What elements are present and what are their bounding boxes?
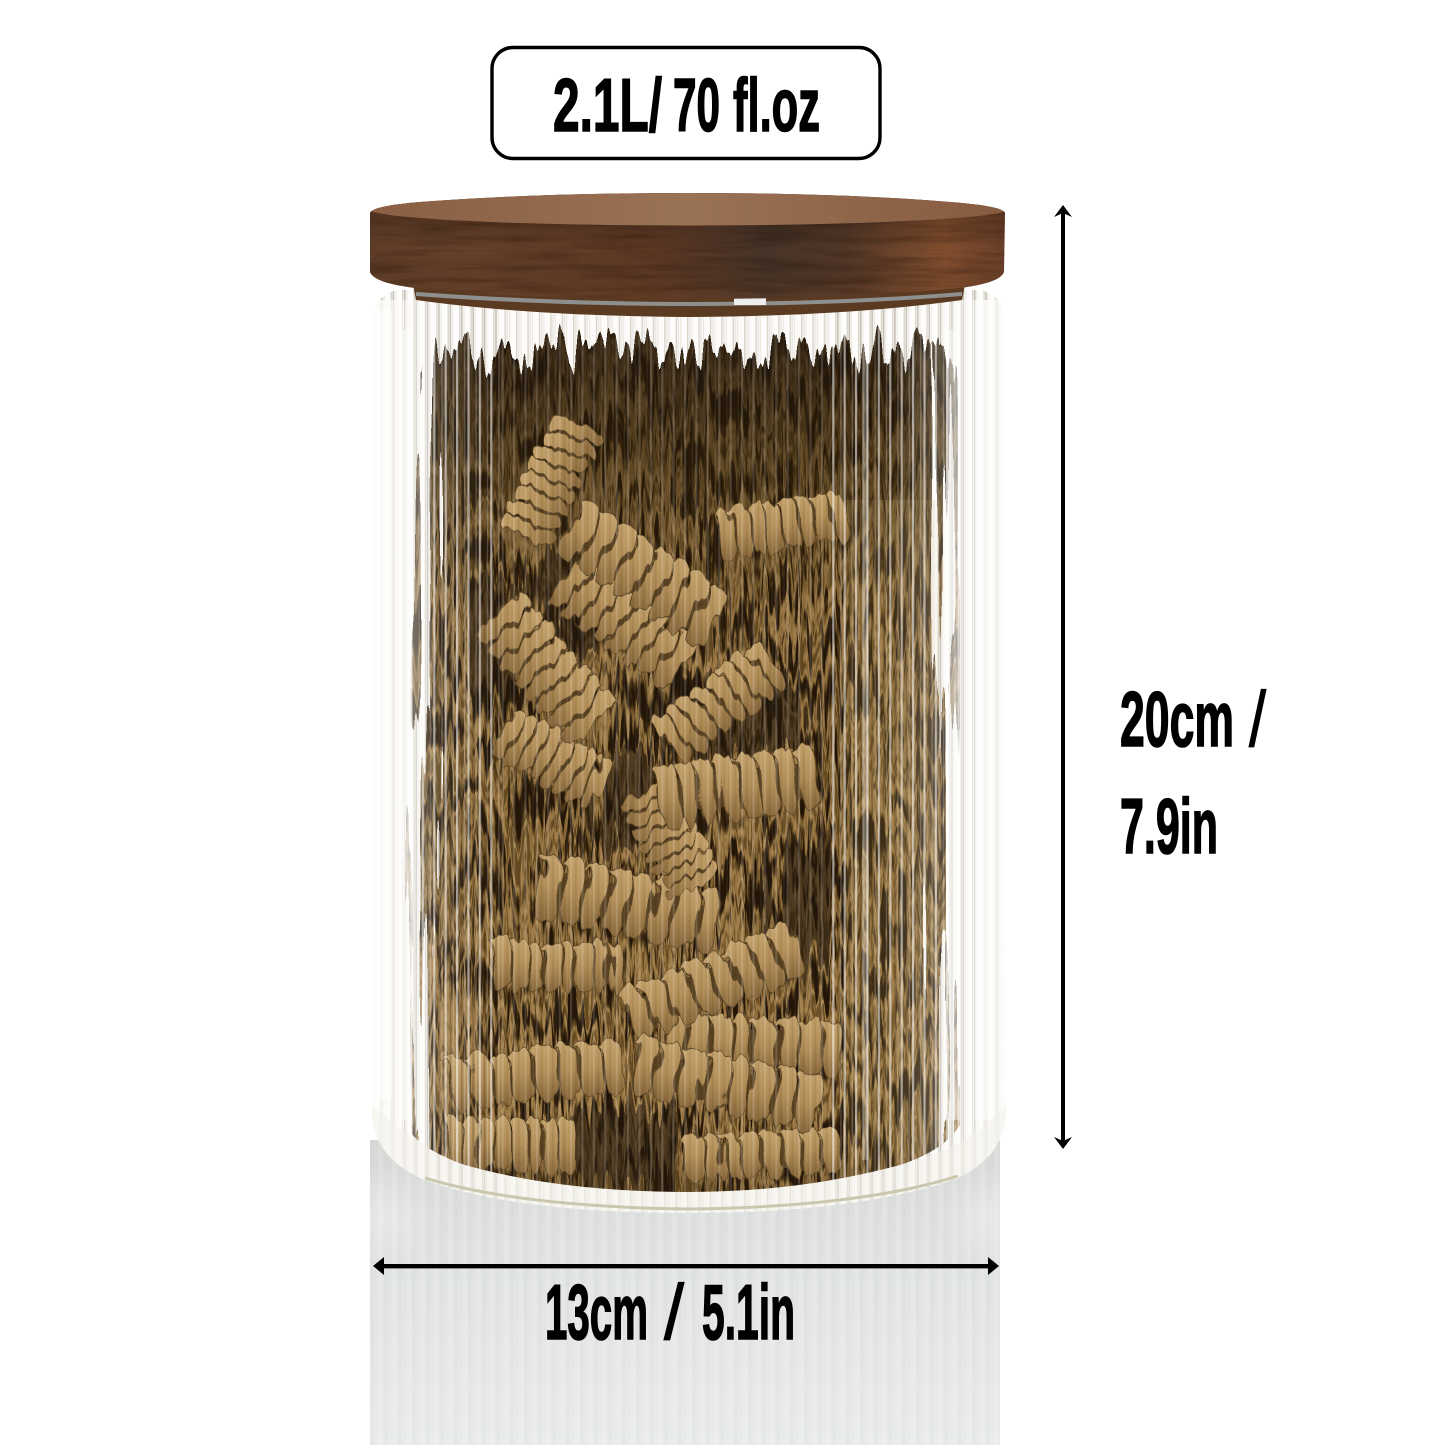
width label: 13cm bbox=[545, 1268, 648, 1356]
glass rib highlights at the sides bbox=[381, 290, 500, 1199]
height arrow bbox=[1054, 205, 1072, 1149]
height label: / bbox=[1249, 675, 1266, 763]
lid side bbox=[368, 190, 1008, 302]
height label: 20cm bbox=[1120, 675, 1234, 763]
base rim bbox=[425, 1176, 958, 1209]
height label: 7.9in bbox=[1120, 782, 1218, 870]
width label: 5.1in bbox=[702, 1268, 795, 1356]
dark hollows between pasta bbox=[460, 530, 830, 1195]
glass jar with ribbed wall and pasta filling bbox=[370, 285, 1010, 1240]
capacity label box: 70 bbox=[673, 63, 720, 147]
lid underside seal bbox=[413, 285, 965, 317]
pasta background mass bbox=[425, 350, 945, 1240]
wooden lid bbox=[368, 190, 1008, 302]
capacity label box: 2.1L/ bbox=[553, 63, 662, 147]
ribbed glass body bbox=[370, 285, 1010, 1220]
glass bottom band bbox=[372, 1105, 1006, 1220]
lighter pasta tone on the right bbox=[845, 500, 940, 1180]
table reflection of the jar bbox=[335, 1140, 1038, 1445]
width label: / bbox=[664, 1268, 684, 1356]
width arrow bbox=[373, 1257, 999, 1275]
faint ribs over the centre bbox=[500, 285, 830, 1220]
clear glass side fade bbox=[372, 300, 1006, 1200]
lid top surface bbox=[368, 192, 1008, 226]
height label bbox=[1120, 675, 1266, 870]
glass rib highlights at right side bbox=[830, 285, 1010, 1220]
bright vertical reflections bbox=[378, 300, 993, 1160]
capacity label box bbox=[492, 48, 880, 158]
capacity label box: fl.oz bbox=[733, 63, 820, 147]
foreground fusilli pasta bbox=[442, 410, 850, 1183]
